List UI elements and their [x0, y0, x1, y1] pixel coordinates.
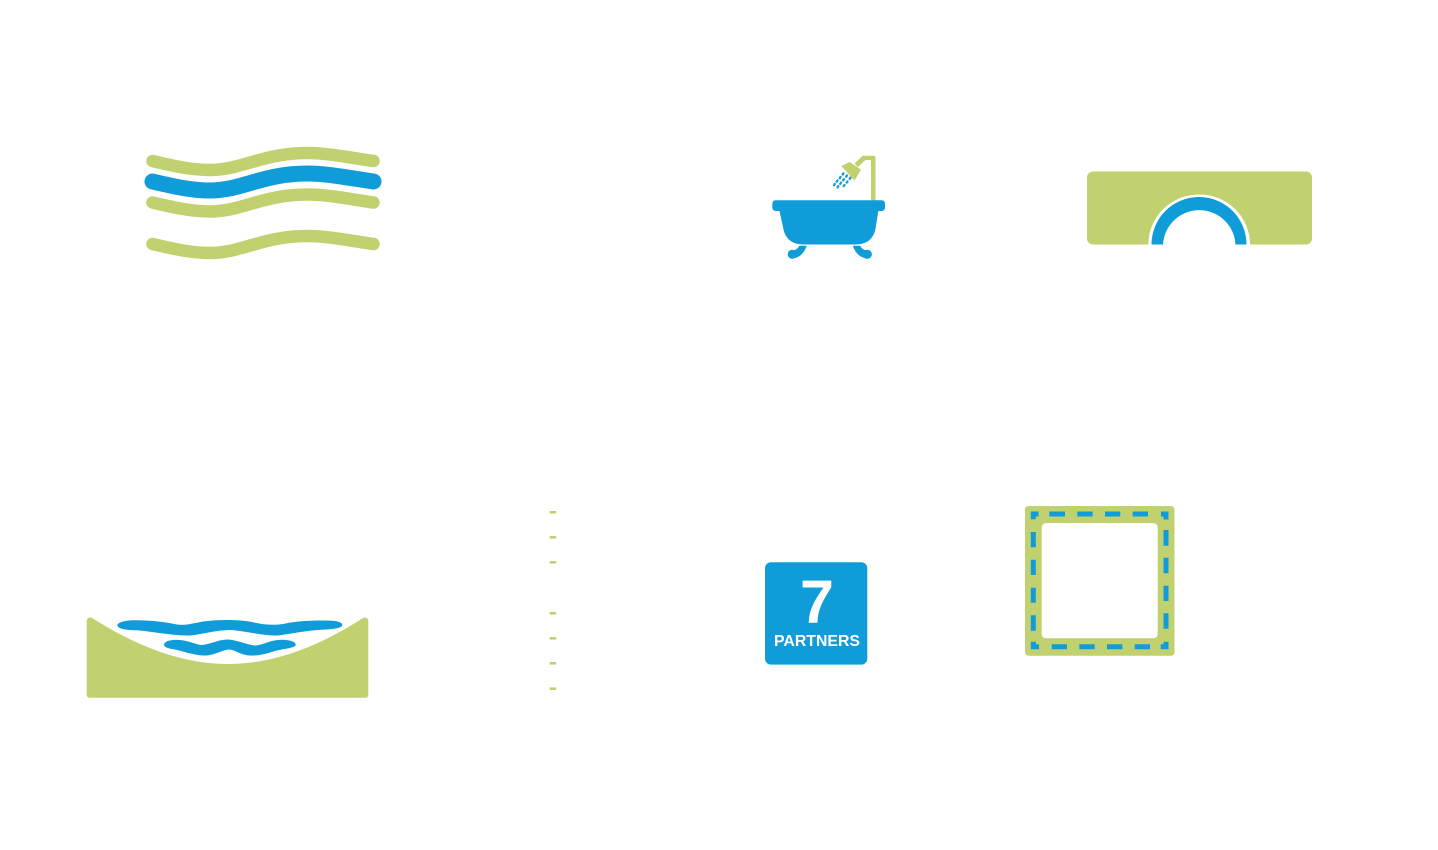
shower head [841, 162, 861, 180]
icon: bathtub with shower [772, 156, 885, 259]
badge number: 7 [800, 568, 834, 636]
badge label: PARTNERS [774, 633, 860, 650]
dashed line [1033, 514, 1166, 647]
icon: river waves [152, 153, 374, 253]
tub feet [788, 246, 872, 259]
tub rim and body [772, 200, 885, 244]
icon: water basin [87, 618, 368, 698]
lower water ripple [164, 640, 296, 656]
shower drops [834, 173, 850, 187]
icon: dashed square frame [1025, 506, 1174, 656]
tick marks list [550, 511, 556, 690]
icon: bridge arch [1087, 172, 1312, 244]
shower pipe [854, 156, 876, 200]
badge: 7 partners [765, 562, 867, 665]
upper water ripple [117, 620, 342, 636]
